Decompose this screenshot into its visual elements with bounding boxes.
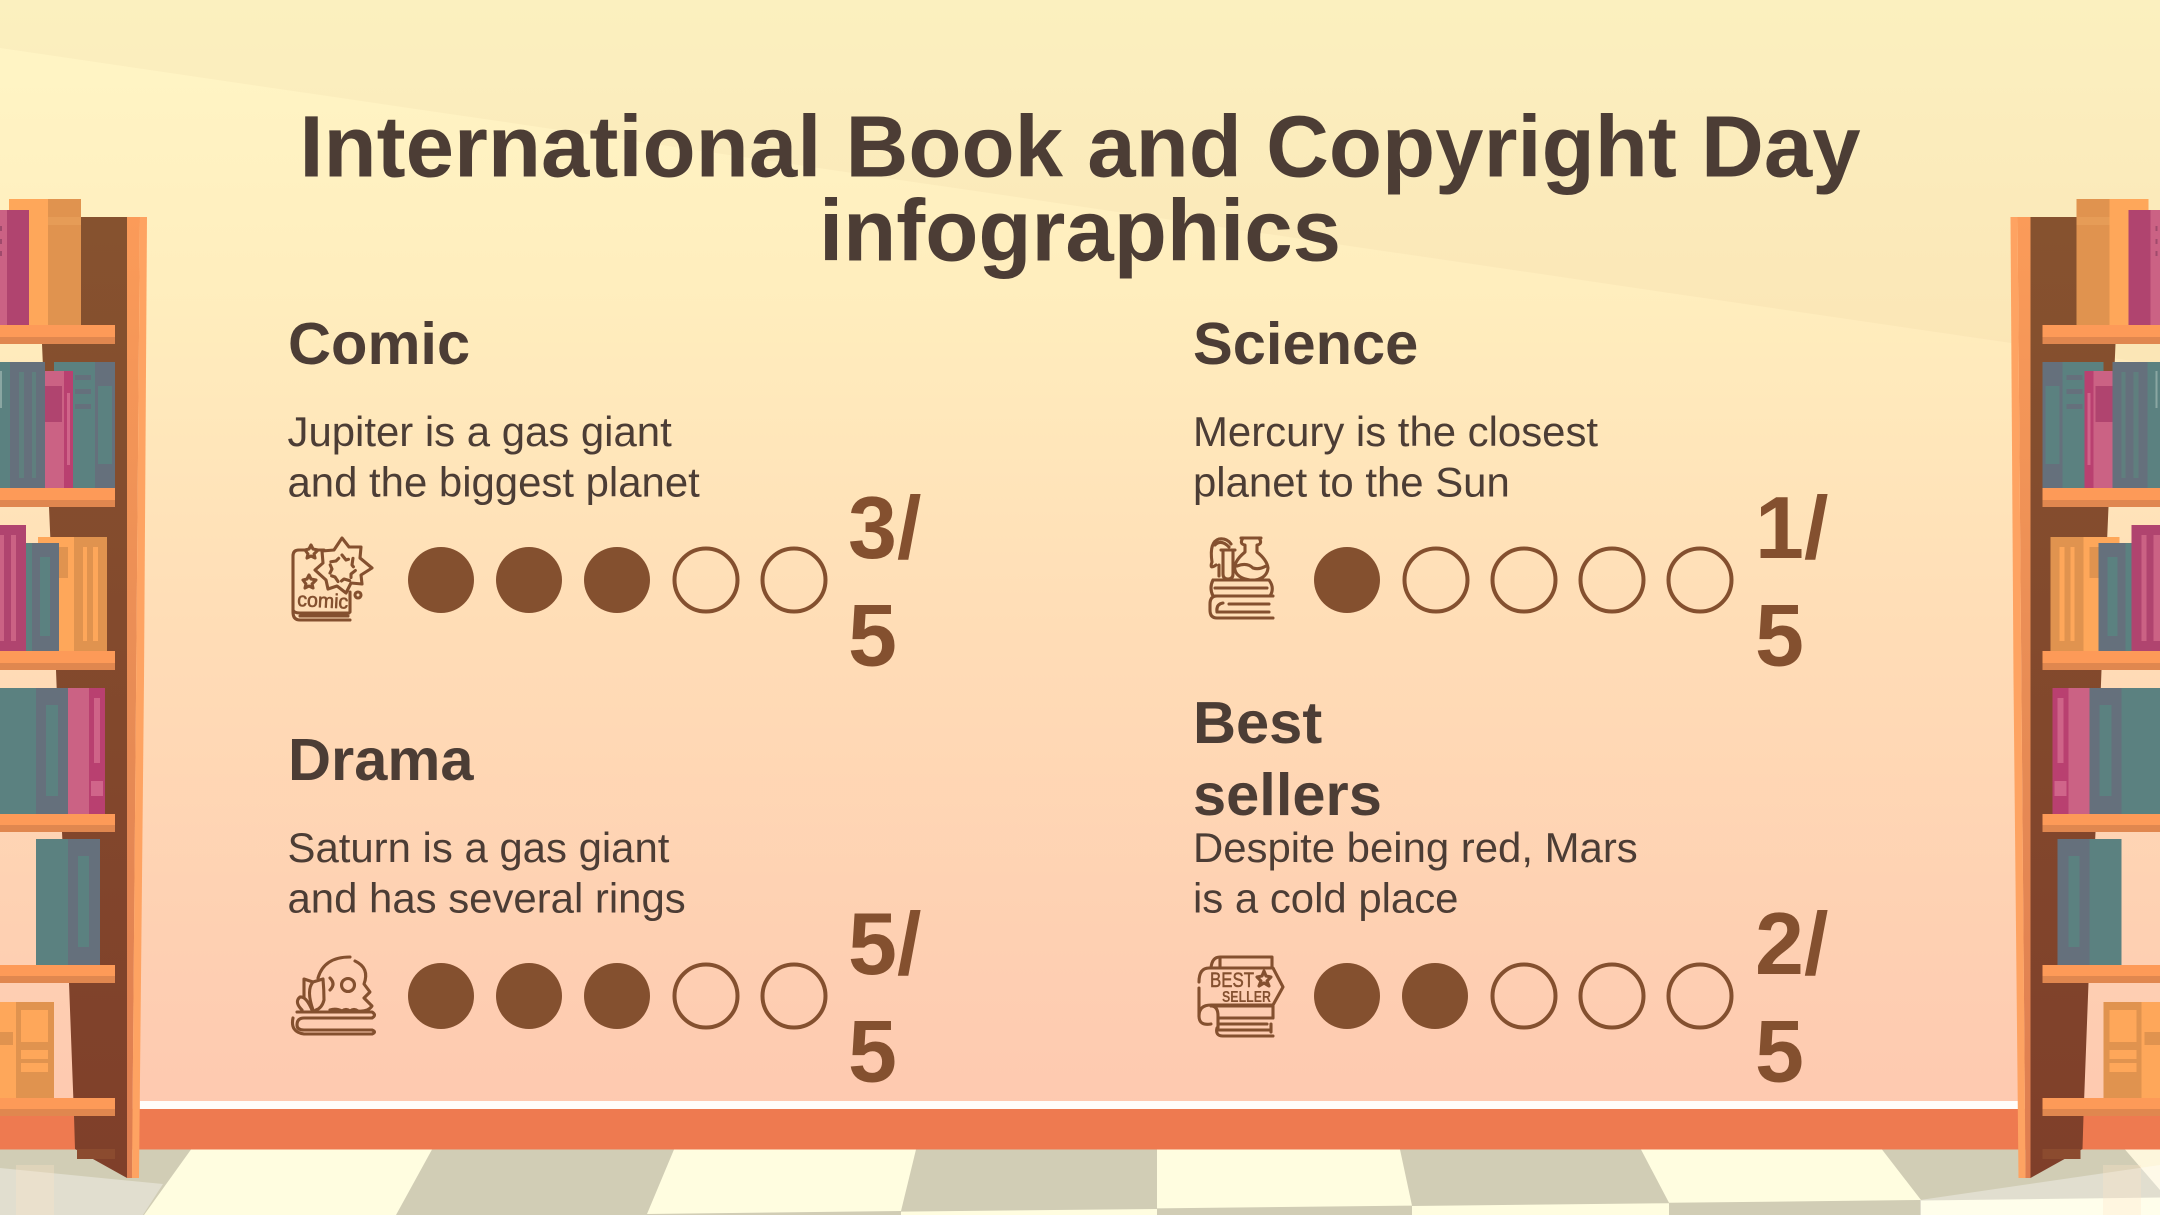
score: 3/5: 5 bbox=[848, 586, 897, 684]
text: best sellers description bbox=[1193, 824, 1638, 922]
score: 5/5: 5 bbox=[848, 1002, 897, 1100]
text: drama description: and has several rings bbox=[288, 874, 686, 922]
orange skirting board bbox=[0, 1109, 2160, 1150]
text: best sellers description: Despite being red, Mars bbox=[1193, 824, 1638, 871]
text: science description: Mercury is the closest bbox=[1193, 408, 1598, 455]
score: 2/5 bbox=[1755, 894, 1828, 1100]
score: 5/5 bbox=[848, 894, 921, 1100]
heading: best sellers: sellers bbox=[1193, 761, 1382, 828]
left bookcase bbox=[0, 199, 147, 1178]
score: 1/5 bbox=[1755, 478, 1828, 684]
panel: drama bbox=[288, 726, 921, 1100]
text: drama description bbox=[288, 824, 686, 922]
panel: best sellers bbox=[1193, 689, 1828, 1100]
text: science description: planet to the Sun bbox=[1193, 458, 1510, 506]
checkered floor bbox=[0, 1150, 2160, 1215]
heading: best sellers bbox=[1193, 689, 1382, 828]
heading: comic: Comic bbox=[288, 310, 470, 377]
icon: best seller book: BEST bbox=[1210, 969, 1254, 992]
score: 1/5: 1/ bbox=[1755, 478, 1828, 577]
text: science description bbox=[1193, 408, 1598, 506]
icon: books and flask bbox=[1210, 538, 1273, 618]
score: 5/5: 5/ bbox=[848, 894, 921, 993]
rating dots: 3 of 5 bbox=[408, 547, 826, 613]
score: 2/5: 2/ bbox=[1755, 894, 1828, 993]
score: 1/5: 5 bbox=[1755, 586, 1804, 684]
white skirting strip bbox=[140, 1101, 2020, 1109]
score: 2/5: 5 bbox=[1755, 1002, 1804, 1100]
text: comic description: and the biggest planet bbox=[288, 458, 700, 506]
icon: best seller book bbox=[1199, 957, 1283, 1036]
panel: science bbox=[1193, 310, 1828, 684]
score: 3/5 bbox=[848, 478, 921, 684]
icon: comic book: comic bbox=[297, 589, 349, 614]
text: best sellers description: is a cold place bbox=[1193, 874, 1458, 922]
rating dots: 2 of 5 bbox=[1314, 963, 1732, 1029]
rating dots: 1 of 5 bbox=[1314, 547, 1732, 613]
right bookcase bbox=[2010, 199, 2160, 1178]
icon: comic book bbox=[293, 538, 372, 620]
icon: skull on book bbox=[292, 957, 374, 1034]
title: infographics bbox=[819, 182, 1341, 280]
icon: best seller book: SELLER bbox=[1222, 989, 1271, 1006]
title bbox=[299, 98, 1861, 280]
heading: science: Science bbox=[1193, 310, 1418, 377]
panel: comic bbox=[288, 310, 921, 684]
text: comic description bbox=[288, 408, 700, 506]
light beam shadow on wall bbox=[0, 0, 2160, 365]
title: International Book and Copyright Day bbox=[299, 98, 1861, 196]
score: 3/5: 3/ bbox=[848, 478, 921, 577]
text: drama description: Saturn is a gas giant bbox=[288, 824, 670, 871]
text: comic description: Jupiter is a gas giant bbox=[288, 408, 672, 455]
heading: best sellers: Best bbox=[1193, 689, 1322, 756]
rating dots: 3 of 5 bbox=[408, 963, 826, 1029]
heading: drama: Drama bbox=[288, 726, 474, 793]
